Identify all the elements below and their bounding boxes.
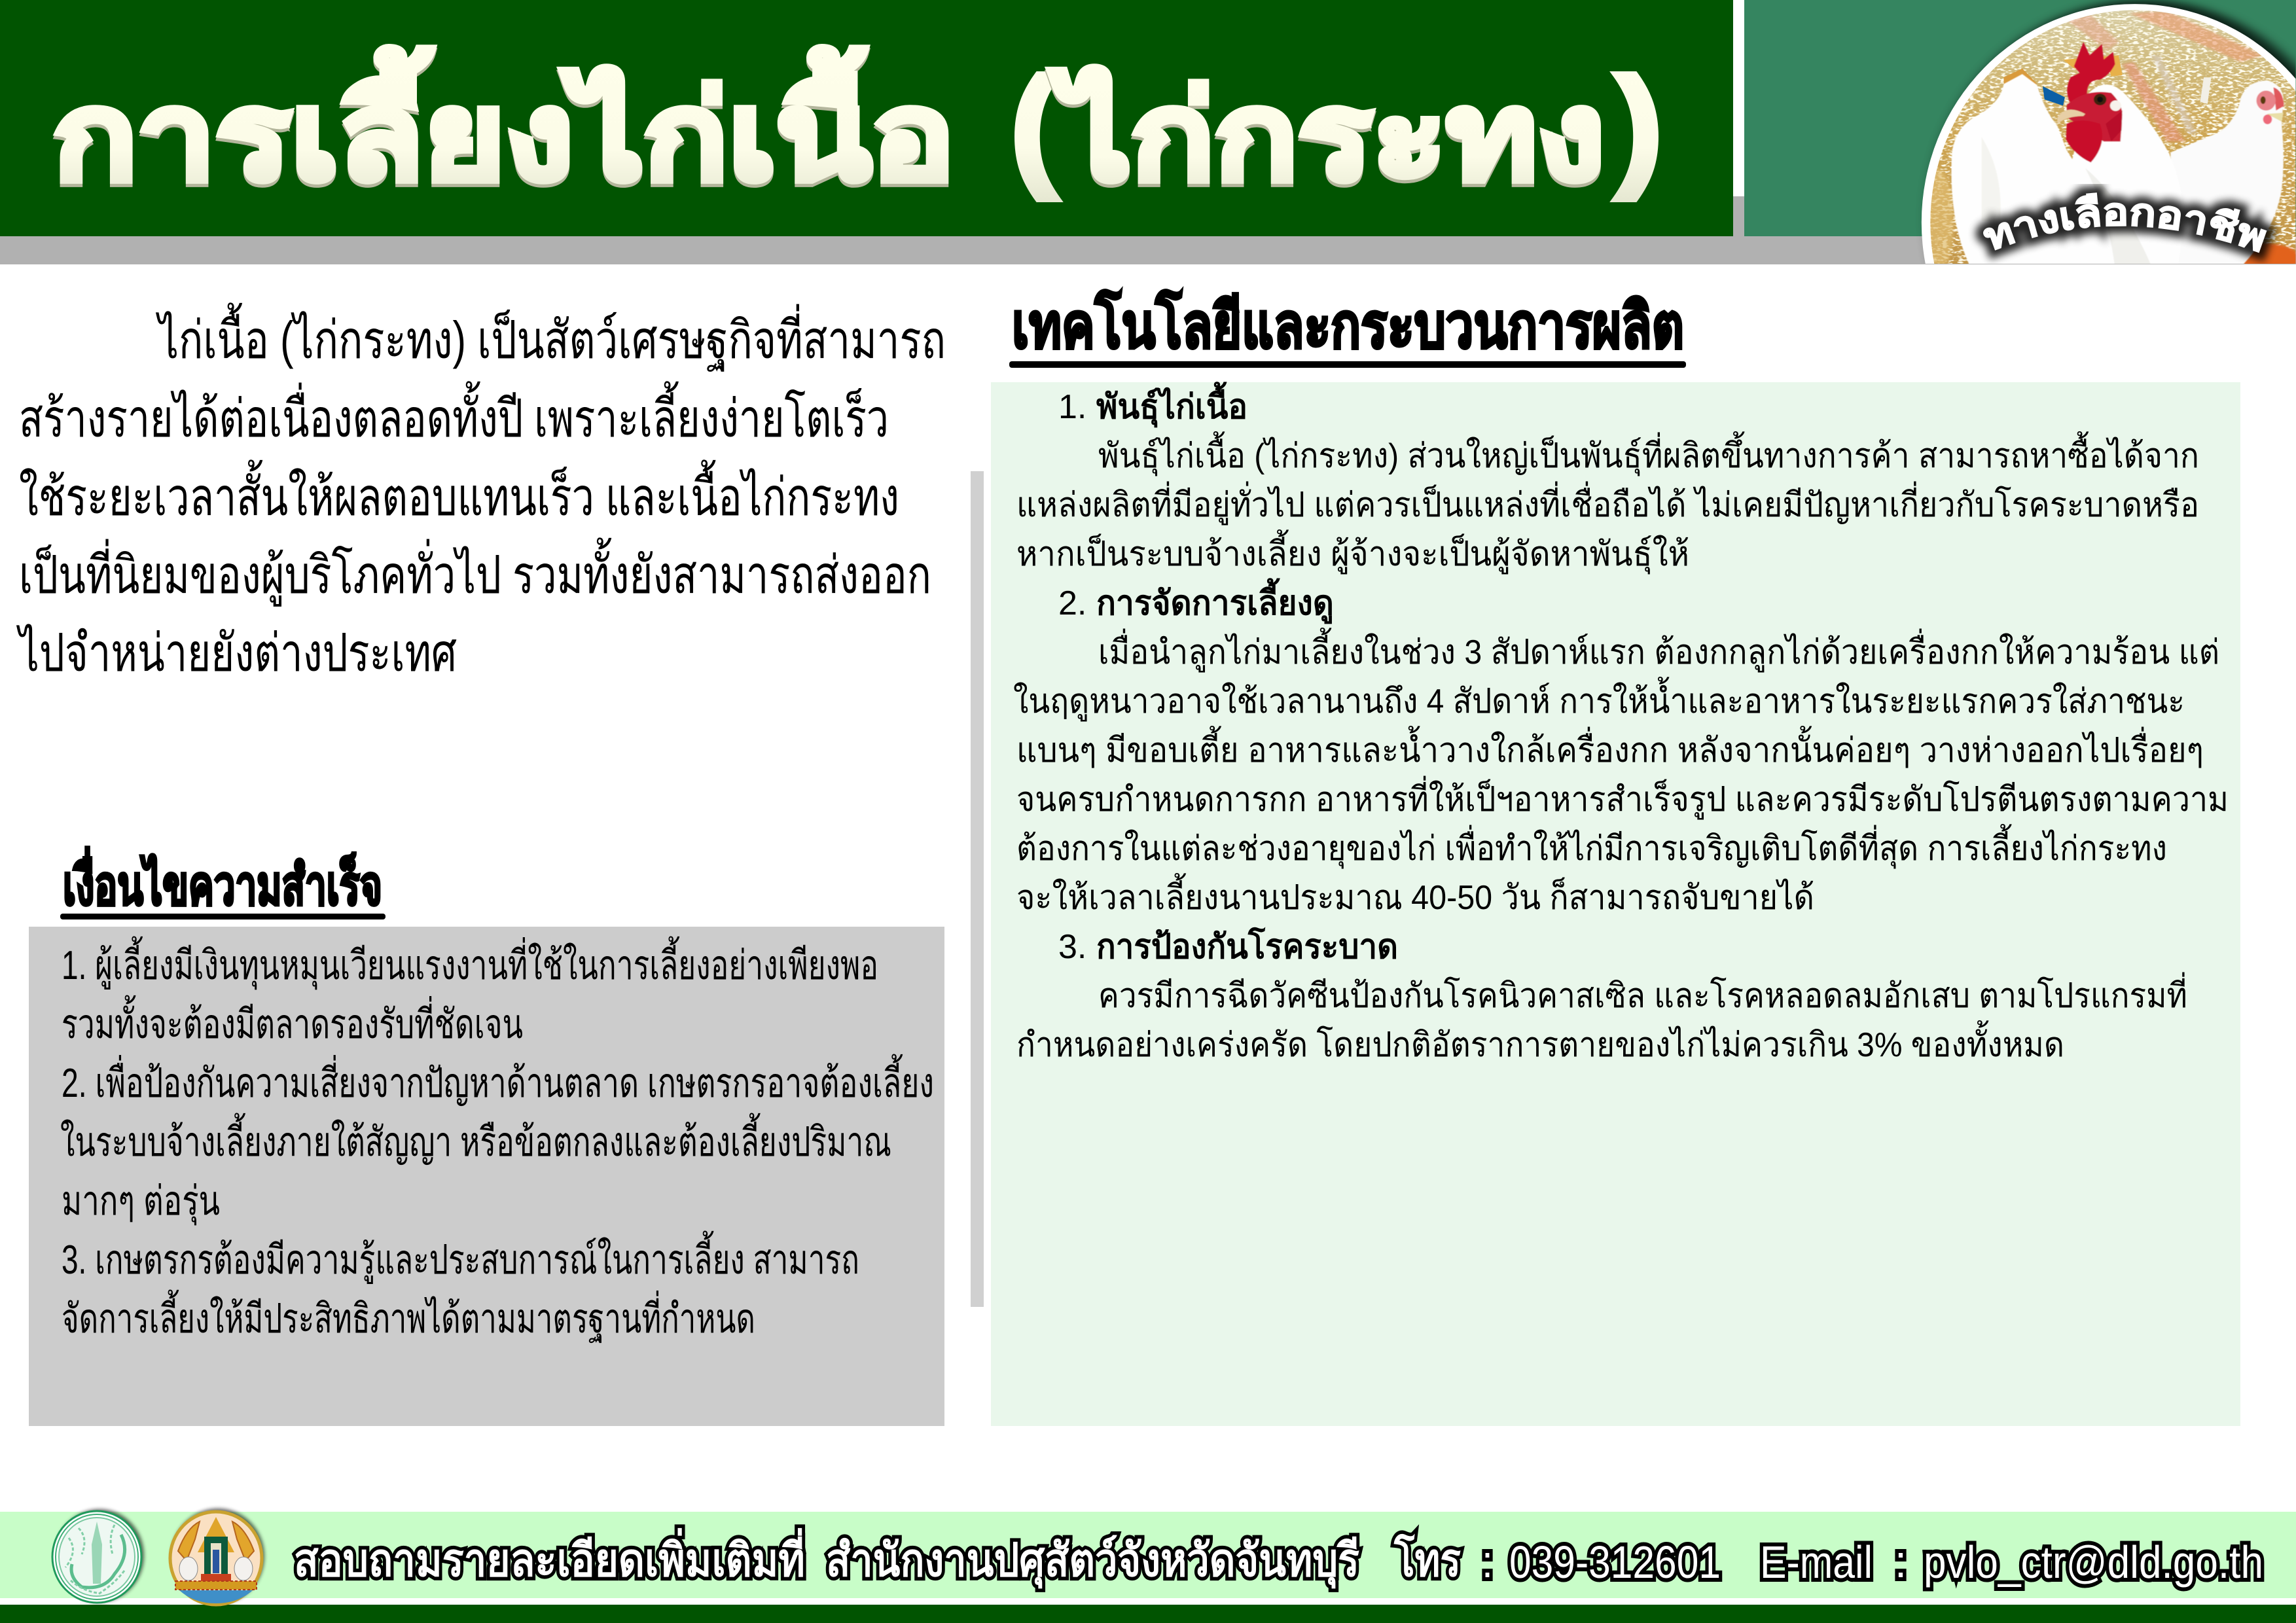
panel: success conditions: รวมทั้งจะต้องมีตลาดรองรับที่ชัดเจน bbox=[62, 995, 523, 1047]
footer contact text: pvlo_ctr@dld.go.th bbox=[1924, 1537, 2263, 1588]
heading: success conditions: เงื่อนไขความสำเร็จ bbox=[63, 847, 382, 916]
icon: department of livestock seal bbox=[52, 1509, 144, 1603]
section 2: husbandry: แบนๆ มีขอบเตี้ย อาหารและน้ำวางใกล้เครื่องกก หลังจากนั้นค่อยๆ วางห่างออกไปเรื่อยๆ bbox=[1016, 726, 2204, 770]
section 1: breed: พันธุ์ไก่เนื้อ (ไก่กระทง) ส่วนใหญ่เป็นพันธุ์ที่ผลิตขึ้นทางการค้า สามารถหาซื้อได้จาก bbox=[1098, 431, 2199, 476]
footer contact text: : bbox=[1482, 1536, 1493, 1587]
rear hen bbox=[2170, 80, 2284, 267]
intro paragraph bbox=[16, 302, 946, 682]
panel: success conditions: 3. เกษตรกรต้องมีความรู้และประสบการณ์ในการเลี้ยง สามารถ bbox=[62, 1230, 859, 1284]
heading: success conditions bbox=[60, 847, 386, 919]
vertical divider bar bbox=[971, 471, 984, 1307]
footer contact text: สอบถามรายละเอียดเพิ่มเติมที่ bbox=[294, 1527, 805, 1586]
intro paragraph: ไปจำหน่ายยังต่างประเทศ bbox=[16, 624, 457, 682]
footer contact text: : bbox=[1895, 1536, 1907, 1587]
section 2: husbandry: ในฤดูหนาวอาจใช้เวลานานถึง 4 สัปดาห์ การให้น้ำและอาหารในระยะแรกควรใส่ภาชนะ bbox=[1013, 677, 2185, 722]
section 3: disease prevention: การป้องกันโรคระบาด bbox=[1096, 926, 1398, 966]
section 1: breed: แหล่งผลิตที่มีอยู่ทั่วไป แต่ควรเป็นแหล่งที่เชื่อถือได้ ไม่เคยมีปัญหาเกี่ยวกับโรคระบาดหรือ bbox=[1016, 481, 2199, 526]
header: dark green title panel bbox=[0, 0, 1733, 236]
panel: success conditions: 1. ผู้เลี้ยงมีเงินทุนหมุนเวียนแรงงานที่ใช้ในการเลี้ยงอย่างเพียงพอ bbox=[62, 936, 878, 990]
footer contact text: 039-312601 bbox=[1509, 1537, 1721, 1588]
curved label: career option: ทางเลือกอาชีพ bbox=[1970, 184, 2281, 264]
panel: success conditions bbox=[29, 927, 944, 1426]
face bbox=[2067, 92, 2123, 141]
panel: success conditions: มากๆ ต่อรุ่น bbox=[62, 1179, 220, 1225]
section 3: disease prevention: ควรมีการฉีดวัคซีนป้องกันโรคนิวคาสเซิล และโรคหลอดลมอักเสบ ตามโปรแกรมที่ bbox=[1098, 972, 2187, 1015]
intro paragraph: เป็นที่นิยมของผู้บริโภคทั่วไป รวมทั้งยังสามารถส่งออก bbox=[19, 537, 931, 607]
beak bbox=[2058, 109, 2085, 124]
section 2: husbandry: จะให้เวลาเลี้ยงนานประมาณ 40-50 วัน ก็สามารถจับขายได้ bbox=[1016, 873, 1814, 917]
title: ) bbox=[1615, 50, 1662, 200]
title: การเลี้ยงไก่เนื้อ bbox=[53, 50, 955, 208]
footer contact text bbox=[294, 1527, 2263, 1589]
section 2: husbandry: เมื่อนำลูกไก่มาเลี้ยงในช่วง 3 สัปดาห์แรก ต้องกกลูกไก่ด้วยเครื่องกกให้ความร้อน แต่ bbox=[1098, 628, 2219, 673]
footer contact text: สำนักงานปศุสัตว์จังหวัดจันทบุรี bbox=[826, 1535, 1359, 1589]
header: grey notch between panels bbox=[1733, 196, 1744, 236]
header: teal green panel bbox=[1744, 0, 2296, 236]
wattle bbox=[2066, 120, 2102, 162]
panel: success conditions: 2. เพื่อป้องกันความเสี่ยงจากปัญหาด้านตลาด เกษตรกรอาจต้องเลี้ยง bbox=[62, 1054, 934, 1106]
panel: success conditions: ในระบบจ้างเลี้ยงภายใต้สัญญา หรือข้อตกลงและต้องเลี้ยงปริมาณ bbox=[60, 1113, 891, 1165]
title: ( bbox=[1011, 50, 1058, 200]
heading: technology and production: เทคโนโลยีและกระบวนการผลิต bbox=[1012, 290, 1684, 361]
section 2: husbandry: จนครบกำหนดการกก อาหารที่ให้เป็ฯอาหารสำเร็จรูป และควรมีระดับโปรตีนตรงตามความ bbox=[1016, 776, 2229, 820]
section 1: breed bbox=[1016, 382, 2199, 575]
intro paragraph: ไก่เนื้อ (ไก่กระทง) เป็นสัตว์เศรษฐกิจที่สามารถ bbox=[155, 302, 946, 372]
section 1: breed: พันธุ์ไก่เนื้อ bbox=[1096, 382, 1247, 428]
intro paragraph: สร้างรายได้ต่อเนื่องตลอดทั้งปี เพราะเลี้ยงง่ายโตเร็ว bbox=[19, 381, 889, 448]
curved label: career option: ทางเลือกอาชีพ bbox=[1983, 192, 2267, 253]
title: ไก่กระทง bbox=[1049, 66, 1605, 205]
footer contact text: โทร bbox=[1393, 1533, 1461, 1586]
title bbox=[53, 47, 1662, 208]
footer: light green bar bbox=[0, 1512, 2296, 1598]
intro paragraph: ใช้ระยะเวลาสั้นให้ผลตอบแทนเร็ว และเนื้อไก่กระทง bbox=[19, 459, 899, 526]
section 2: husbandry: ต้องการในแต่ละช่วงอายุของไก่ เพื่อทำให้ไก่มีการเจริญเติบโตดีที่สุด การเลี้ยงไก่กระทง bbox=[1016, 824, 2167, 869]
title: ไก่กระทง bbox=[1049, 69, 1605, 208]
section 2: husbandry: การจัดการเลี้ยงดู bbox=[1096, 578, 1334, 624]
footer: dark green strip bbox=[0, 1605, 2296, 1623]
icon: ministry seal bbox=[170, 1508, 264, 1605]
section 3: disease prevention: กำหนดอย่างเคร่งครัด โดยปกติอัตราการตายของไก่ไม่ควรเกิน 3% ของทั้งหมด bbox=[1016, 1020, 2064, 1064]
section 2: husbandry: 2. bbox=[1058, 584, 1086, 622]
main hen bbox=[1951, 42, 2183, 267]
footer contact text: E-mail bbox=[1760, 1537, 1873, 1588]
section 1: breed: หากเป็นระบบจ้างเลี้ยง ผู้จ้างจะเป็นผู้จัดหาพันธุ์ให้ bbox=[1016, 529, 1689, 575]
circular chicken photo bbox=[1921, 0, 2296, 264]
panel: technology and production bbox=[991, 382, 2240, 1426]
panel: success conditions: จัดการเลี้ยงให้มีประสิทธิภาพได้ตามมาตรฐานที่กำหนด bbox=[62, 1289, 755, 1343]
section 3: disease prevention bbox=[1016, 926, 2187, 1064]
comb bbox=[2067, 42, 2115, 106]
section 1: breed: 1. bbox=[1058, 388, 1086, 426]
title: การเลี้ยงไก่เนื้อ bbox=[53, 47, 955, 205]
section 3: disease prevention: 3. bbox=[1058, 928, 1086, 966]
header band: grey strip bbox=[0, 236, 2296, 264]
section 2: husbandry bbox=[1013, 578, 2229, 917]
